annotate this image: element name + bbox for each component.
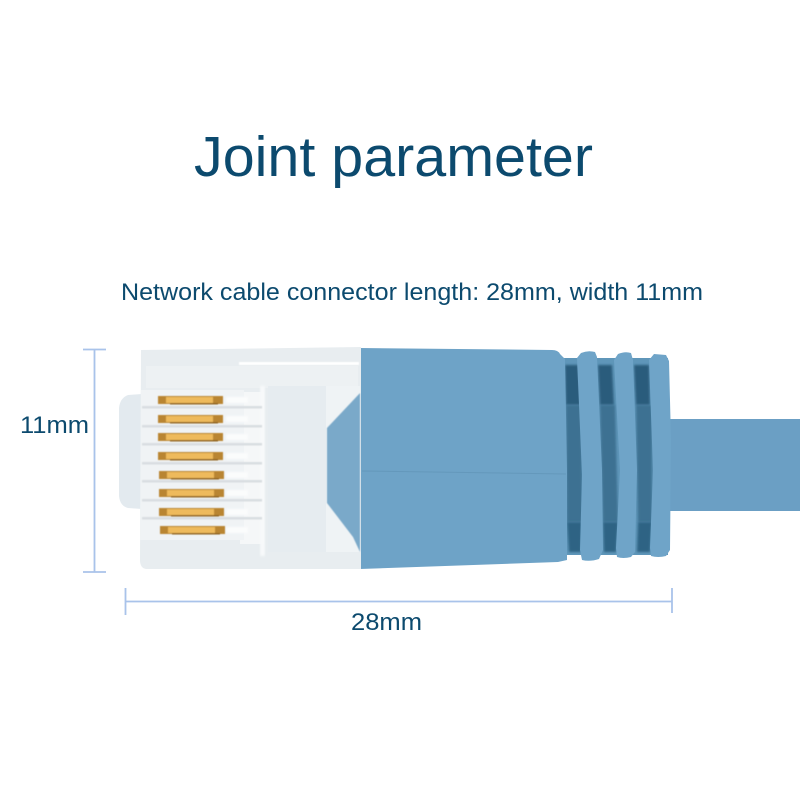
- boot grooves: [560, 358, 668, 555]
- dimension: length 28mm: [126, 588, 672, 636]
- dimension: length 28mm: 28mm: [351, 609, 422, 636]
- title: Joint parameter: [194, 125, 593, 189]
- dimension: height 11mm: 11mm: [20, 412, 89, 439]
- clear RJ45 plug: [119, 347, 361, 569]
- gold contacts: [158, 396, 225, 534]
- boot ribs: [577, 351, 671, 561]
- flat cable: [668, 419, 800, 511]
- subtitle: Network cable connector length: 28mm, width 11mm: [121, 279, 703, 306]
- strain relief boot: [360, 348, 671, 569]
- plug latch tab: [119, 394, 142, 509]
- dimension: height 11mm: [20, 350, 106, 572]
